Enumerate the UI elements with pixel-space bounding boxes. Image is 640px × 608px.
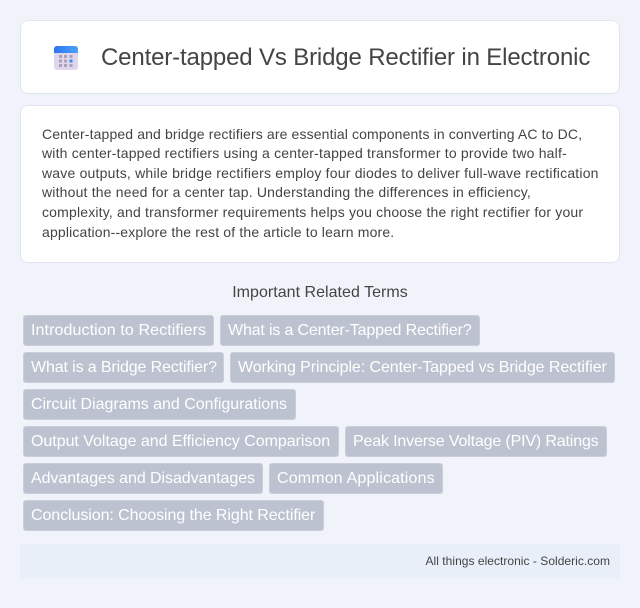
tag xyxy=(23,315,214,346)
intro paragraph: wave outputs, while bridge rectifiers employ four diodes to deliver full-wave rectification xyxy=(42,165,599,181)
icon: calendar grid xyxy=(54,46,78,70)
related terms heading: Important Related Terms xyxy=(232,284,408,301)
tag xyxy=(345,426,607,457)
tag: Working Principle: Center-Tapped vs Bridge Rectifier xyxy=(238,359,607,376)
header panel xyxy=(20,20,620,94)
intro paragraph xyxy=(42,126,599,240)
tag: Common Applications xyxy=(277,470,435,487)
tag xyxy=(230,352,615,383)
intro paragraph: without the need for a center tap. Understanding the differences in efficiency, xyxy=(42,184,531,200)
related terms tags xyxy=(23,315,615,531)
intro paragraph: application--explore the rest of the article to learn more. xyxy=(42,224,394,240)
tag xyxy=(220,315,480,346)
intro paragraph: Center-tapped and bridge rectifiers are essential components in converting AC to DC, xyxy=(42,126,582,142)
tag xyxy=(23,463,263,494)
footer bar xyxy=(20,544,620,578)
tag xyxy=(23,426,339,457)
tag xyxy=(23,352,224,383)
tag: Advantages and Disadvantages xyxy=(31,470,255,487)
intro text panel xyxy=(20,105,620,263)
intro paragraph: complexity, and transformer requirements helps you choose the right rectifier for your xyxy=(42,204,583,220)
tag xyxy=(23,389,296,420)
tag: What is a Center-Tapped Rectifier? xyxy=(228,322,472,339)
tag: Conclusion: Choosing the Right Rectifier xyxy=(31,507,315,524)
title: Center-tapped Vs Bridge Rectifier in Electronic xyxy=(101,44,590,71)
intro paragraph: with center-tapped rectifiers using a center-tapped transformer to provide two half- xyxy=(42,145,567,161)
tag: Peak Inverse Voltage (PIV) Ratings xyxy=(353,433,599,450)
tag: What is a Bridge Rectifier? xyxy=(31,359,217,376)
tag: Output Voltage and Efficiency Comparison xyxy=(31,433,330,450)
tag xyxy=(23,500,324,531)
tag: Introduction to Rectifiers xyxy=(31,322,206,339)
tag xyxy=(269,463,443,494)
tag: Circuit Diagrams and Configurations xyxy=(31,396,287,413)
footer text: All things electronic - Solderic.com xyxy=(426,554,610,568)
